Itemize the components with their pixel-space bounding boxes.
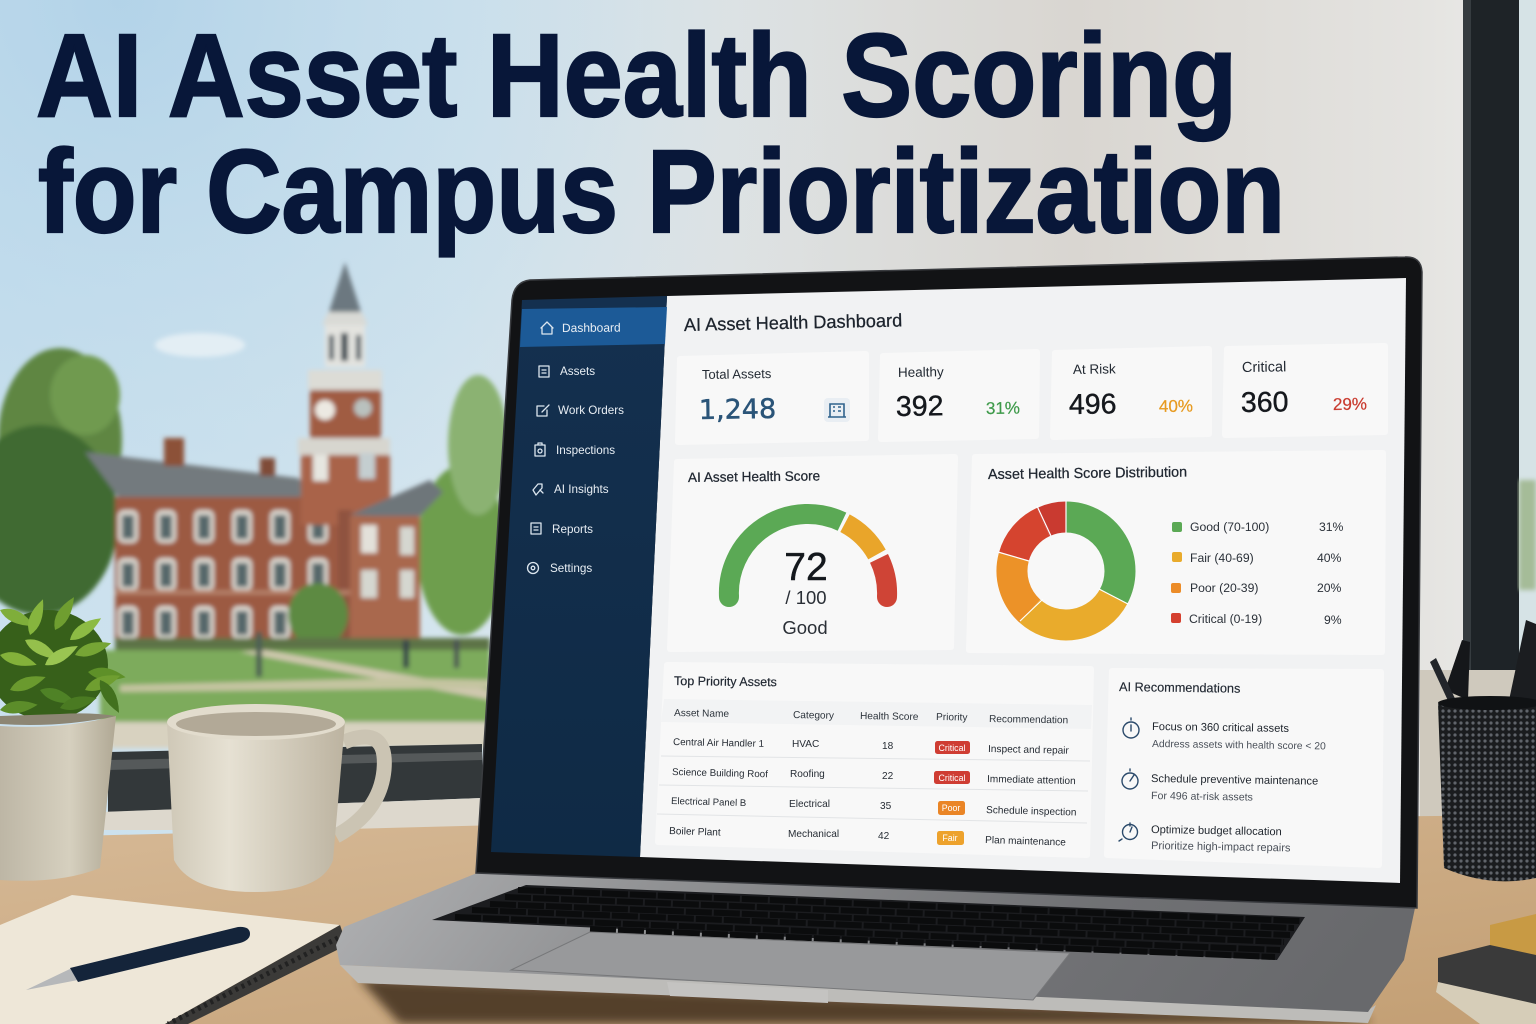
row: Boiler Plant: Fair [942, 833, 958, 843]
panel: critical: Critical [1242, 359, 1286, 376]
panel: at risk: 496 [1069, 388, 1117, 421]
laptop base [336, 873, 1415, 1023]
legend: 20% [1317, 581, 1342, 595]
row: Boiler Plant: Boiler Plant [669, 826, 721, 839]
recommendation 3: Prioritize high-impact repairs [1151, 840, 1291, 854]
panel: healthy: Healthy [898, 364, 944, 380]
table header: Priority [936, 712, 968, 724]
recommendation 1: Focus on 360 critical assets [1152, 721, 1289, 735]
panel: total assets [678, 354, 866, 442]
icon: gauge [1119, 823, 1138, 841]
recommendation 2: Schedule preventive maintenance [1151, 773, 1318, 788]
trackpad [511, 932, 1070, 1000]
panel: health score gauge: Good [782, 617, 828, 638]
panel: at risk: 40% [1159, 397, 1193, 416]
row: Central Air Handler 1: Central Air Handler 1 [673, 737, 764, 750]
panel: score distribution: Asset Health Score Distribution [988, 465, 1187, 483]
panel: health score gauge: 72 [784, 546, 828, 589]
table header: Asset Name [674, 708, 729, 720]
recommendation 3 [1119, 823, 1291, 854]
coffee mug [167, 704, 384, 892]
nav item: Reports: Reports [552, 523, 593, 536]
panel: AI recommendations: AI Recommendations [1119, 680, 1240, 696]
row: Boiler Plant: Mechanical [788, 829, 839, 840]
side wing [350, 480, 443, 518]
nav item: Settings [528, 562, 592, 575]
notebook with pen [0, 895, 347, 1024]
row: Central Air Handler 1 [673, 737, 1070, 757]
panel: sidebar [491, 296, 667, 857]
gauge chart [719, 514, 897, 607]
panel: top priority assets table [657, 665, 1092, 855]
row: Science Building Roof: Science Building Roof [672, 767, 768, 780]
panel: at risk: At Risk [1073, 361, 1116, 377]
recommendation 2 [1122, 769, 1318, 804]
panel: health score gauge: AI Asset Health Score [688, 468, 820, 485]
row: Boiler Plant [669, 826, 1066, 849]
recommendation 1: Address assets with health score < 20 [1152, 739, 1326, 752]
dashboard heading: AI Asset Health Dashboard [684, 310, 902, 335]
panel: health score gauge [670, 457, 955, 649]
legend: Critical (0-19) [1189, 612, 1262, 626]
row: Electrical Panel B: Schedule inspection [986, 805, 1077, 819]
legend: Fair (40-69) [1190, 551, 1254, 565]
legend: 40% [1317, 551, 1342, 565]
title [36, 10, 1285, 258]
lawn [100, 650, 490, 730]
row: Central Air Handler 1: HVAC [792, 739, 819, 750]
panel: healthy [881, 352, 1037, 439]
laptop [336, 257, 1422, 1024]
legend: Poor (20-39) [1190, 581, 1258, 595]
row: Central Air Handler 1: 18 [882, 741, 894, 752]
panel: healthy: 392 [896, 390, 944, 423]
icon: stopwatch [1123, 718, 1139, 738]
row: Electrical Panel B: Electrical [789, 799, 830, 810]
panel: critical [1225, 346, 1385, 435]
nav item: Settings: Settings [550, 562, 592, 575]
nav item: Dashboard [520, 307, 667, 347]
pot [0, 716, 116, 881]
panel: top priority assets table: Top Priority Assets [674, 674, 777, 689]
row: Electrical Panel B: Poor [942, 803, 960, 813]
panel: total assets: Total Assets [702, 366, 772, 382]
recommendation 3: Optimize budget allocation [1151, 824, 1282, 838]
nav item: Reports [531, 523, 593, 536]
campus building scene [0, 262, 508, 748]
row: Boiler Plant: 42 [878, 831, 890, 842]
row: Science Building Roof: Roofing [790, 769, 825, 780]
panel: critical: 29% [1333, 395, 1367, 414]
legend: Good (70-100) [1190, 520, 1269, 534]
panel: healthy: 31% [986, 399, 1020, 418]
nav item: Dashboard: Dashboard [562, 321, 621, 335]
panel: health score gauge: / 100 [785, 587, 827, 608]
nav item: Assets: Assets [560, 365, 595, 378]
left tree [0, 348, 122, 615]
title: for Campus Prioritization [38, 126, 1285, 258]
screen bezel [476, 257, 1422, 908]
row: Boiler Plant: Plan maintenance [985, 835, 1066, 849]
row: Science Building Roof [672, 767, 1076, 787]
panel: critical: 360 [1241, 386, 1289, 419]
right tree [417, 375, 508, 635]
main roof [85, 452, 335, 515]
panel: at risk [1053, 349, 1209, 437]
row: Electrical Panel B [671, 796, 1077, 819]
table header: Category [793, 710, 835, 722]
table header [674, 708, 1068, 726]
stacked books [1436, 914, 1536, 1024]
icon: leaves [0, 594, 127, 720]
donut chart [998, 501, 1128, 625]
nav item: Work Orders: Work Orders [558, 404, 624, 417]
legend [1171, 520, 1344, 627]
main brick wall [115, 497, 340, 642]
nav item: Inspections [535, 443, 615, 457]
legend: 31% [1319, 520, 1344, 534]
row: Science Building Roof: 22 [882, 771, 894, 782]
recommendation 2: For 496 at-risk assets [1151, 790, 1253, 804]
laptop shadow [358, 978, 1368, 1024]
plant in pot [0, 594, 127, 881]
panel: total assets: 1,248 [699, 394, 776, 426]
panel: AI recommendations [1107, 671, 1381, 865]
legend: 9% [1324, 613, 1342, 627]
panel: score distribution [969, 453, 1383, 652]
row: Electrical Panel B: Electrical Panel B [671, 796, 746, 809]
clock tower [298, 262, 390, 640]
recommendation 1 [1123, 718, 1326, 752]
nav item: Assets [539, 365, 595, 378]
title: AI Asset Health Scoring [36, 10, 1237, 142]
icon: timer [1122, 769, 1138, 789]
nav item: Inspections: Inspections [556, 444, 615, 457]
row: Science Building Roof: Immediate attention [987, 774, 1076, 787]
desk [0, 815, 1536, 1024]
row: Central Air Handler 1: Critical [939, 743, 965, 753]
table header: Recommendation [989, 714, 1068, 726]
keyboard [432, 885, 1305, 960]
icon: pen [26, 927, 250, 990]
row: Electrical Panel B: 35 [880, 801, 892, 812]
window frame right [1463, 0, 1519, 670]
icon: building [824, 398, 850, 422]
pencil holder [1430, 620, 1536, 881]
nav item: AI Insights: AI Insights [554, 483, 609, 496]
window sill [108, 744, 482, 812]
row: Central Air Handler 1: Inspect and repair [988, 744, 1070, 757]
row: Science Building Roof: Critical [939, 773, 965, 783]
table header: Health Score [860, 711, 919, 723]
screen content background [640, 278, 1406, 883]
